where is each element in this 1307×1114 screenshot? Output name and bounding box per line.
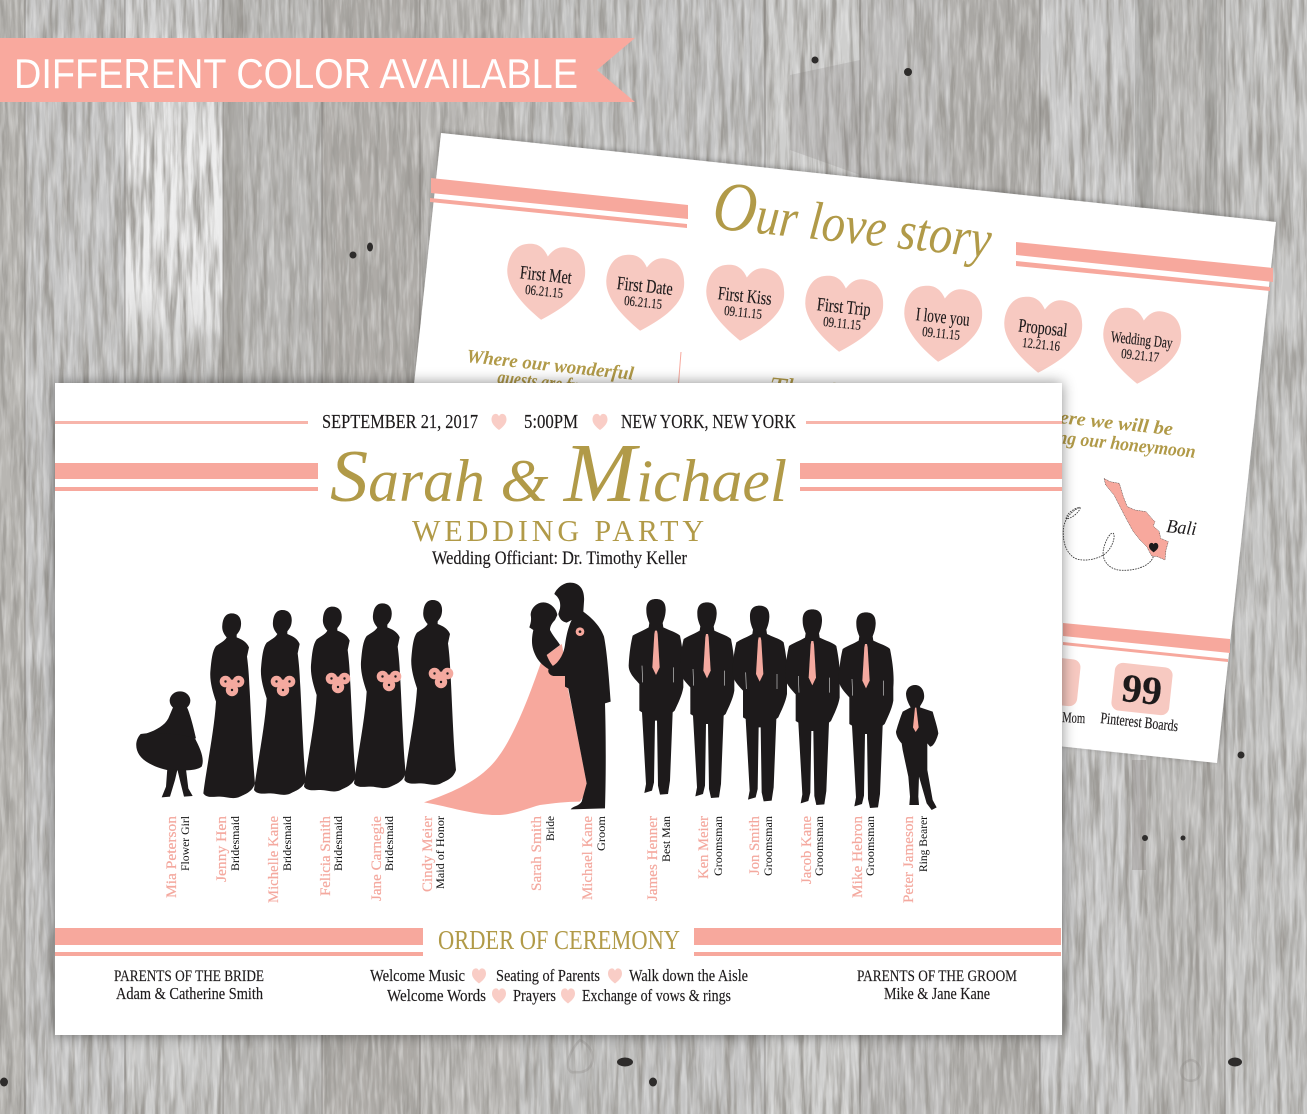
label: jenny hen (214, 815, 242, 882)
heart: wedding day: 09.21.17 (1120, 347, 1160, 366)
label: jane carnegie: Bridesmaid (382, 816, 396, 871)
ceremony order list: Seating of Parents (496, 966, 600, 985)
silhouette: best man james (629, 599, 684, 795)
silhouette: groom (548, 583, 611, 809)
heart: proposal (999, 294, 1085, 377)
heart: i love you: 09.11.15 (921, 325, 961, 344)
silhouette: groomsman jon (732, 606, 787, 801)
silhouette: groomsman jacob (785, 609, 840, 805)
label: jacob kane: Jacob Kane (799, 816, 815, 884)
banner: different color available: DIFFERENT COLOR AVAILABLE (14, 50, 578, 97)
header left stripes (55, 463, 318, 491)
top left stripes (430, 178, 688, 228)
silhouette: groomsman mike (839, 612, 894, 808)
header right stripes (800, 463, 1062, 491)
parents of the bride: PARENTS OF THE BRIDE (114, 968, 264, 985)
wedding party heading: WEDDING PARTY (412, 513, 708, 548)
bali map (1063, 478, 1168, 570)
silhouette: ring bearer (896, 685, 938, 810)
label: ken meier: Ken Meier (696, 816, 712, 879)
silhouette: bride upper body (529, 602, 560, 670)
label: jacob kane: Groomsman (812, 816, 826, 876)
ceremony right stripes (694, 928, 1061, 956)
label: cindy meier: Maid of Honor (433, 816, 447, 889)
label: sarah smith (529, 815, 557, 891)
label: felicia smith: Bridesmaid (331, 816, 345, 871)
parents of the groom (857, 968, 1017, 1003)
groomsmen silhouettes (629, 599, 938, 810)
label: michael kane: Groom (594, 815, 608, 851)
honeymoon script text: Where we will be (1029, 404, 1174, 440)
label: ken meier (696, 816, 725, 879)
heart: first kiss: First Kiss (717, 283, 773, 310)
heart: first met (502, 241, 588, 324)
label: jenny hen: Bridesmaid (228, 816, 242, 871)
date, time and place line (322, 411, 796, 433)
label: michael kane (580, 815, 608, 900)
ceremony order list (370, 966, 748, 1005)
silhouette: bride dress (424, 644, 587, 815)
stat label: pinterest boards: Pinterest Boards (1100, 710, 1179, 735)
heart: first kiss: 09.11.15 (723, 304, 763, 323)
ceremony order list: Walk down the Aisle (629, 966, 748, 985)
ceremony order list: Welcome Music (370, 966, 465, 985)
parents of the bride (114, 968, 264, 1003)
label: jon smith: Groomsman (761, 816, 775, 876)
heart: first trip (800, 273, 886, 356)
label: michelle kane: Michelle Kane (266, 816, 282, 903)
front card: wedding party (55, 383, 1062, 1035)
heart: first met: 06.21.15 (524, 283, 564, 302)
label: peter jameson (901, 815, 930, 903)
ceremony left stripes (55, 928, 423, 956)
script title: our love story: Our love story (709, 167, 996, 274)
label: james henner: James Henner (645, 816, 661, 901)
boutonniere (576, 627, 584, 636)
label: james henner: Best Man (659, 816, 673, 862)
label: michael kane: Michael Kane (580, 816, 596, 900)
label: ken meier: Groomsman (711, 816, 725, 876)
guests script text: Where our wonderful (465, 346, 635, 385)
label: mia peterson: Mia Peterson (164, 815, 180, 898)
silhouette: bridesmaid michelle (254, 610, 306, 795)
label: mike hebron: Groomsman (863, 816, 877, 876)
couple names: Sarah & Michael (330, 427, 787, 520)
bali label: Bali (1165, 516, 1198, 540)
back card: our love story (383, 133, 1276, 763)
heart: wedding day: Wedding Day (1110, 329, 1173, 352)
heart: proposal: 12.21.16 (1021, 336, 1061, 355)
stat: 99 pinterest boards (1111, 662, 1173, 716)
top right stripes (1016, 242, 1273, 291)
parents of the groom: PARENTS OF THE GROOM (857, 968, 1017, 985)
vertical divider (678, 352, 681, 390)
label: michelle kane (266, 816, 294, 903)
heart: wedding day (1098, 305, 1184, 388)
heart: first date: First Date (616, 273, 674, 300)
date, time and place line: 5:00PM (524, 411, 578, 433)
label: cindy meier: Cindy Meier (420, 816, 436, 892)
label: michelle kane: Bridesmaid (280, 816, 294, 871)
parents of the groom: Mike & Jane Kane (884, 984, 990, 1003)
silhouette: bridesmaid jane (354, 603, 406, 788)
label: jane carnegie (369, 816, 396, 901)
stat: 99 pinterest boards: 99 (1120, 665, 1164, 714)
header thin lines (55, 421, 1062, 424)
parents of the bride: Adam & Catherine Smith (116, 984, 264, 1003)
heart: first trip: 09.11.15 (822, 315, 862, 334)
label: sarah smith: Bride (543, 816, 557, 841)
label: jon smith: Jon Smith (747, 815, 763, 875)
label: sarah smith: Sarah Smith (529, 815, 545, 891)
silhouette: flower girl (136, 691, 203, 797)
ceremony order list: Welcome Words (387, 986, 486, 1005)
silhouette: groomsman ken (680, 602, 735, 798)
label: felicia smith: Felicia Smith (318, 815, 334, 896)
label: jane carnegie: Jane Carnegie (369, 816, 385, 901)
label: jon smith (747, 815, 775, 876)
silhouette: bridesmaid jenny (203, 613, 255, 798)
honeymoon script text: spending our honeymoon (1009, 422, 1197, 463)
vertical name labels (164, 815, 930, 903)
ceremony order list: Prayers (513, 986, 556, 1005)
label: peter jameson: Ring Bearer (916, 816, 930, 872)
heart: first kiss (701, 262, 787, 345)
heart: proposal: Proposal (1017, 315, 1068, 342)
bouquets (220, 668, 453, 696)
heart: first date (601, 252, 687, 335)
bottom stripes (1063, 623, 1230, 662)
heart: first met: First Met (519, 262, 573, 289)
label: felicia smith (318, 815, 345, 896)
silhouette: bridesmaid felicia (304, 607, 356, 791)
label: james henner (645, 816, 673, 901)
officiant: Wedding Officiant: Dr. Timothy Keller (432, 548, 688, 569)
label: mia peterson (164, 815, 192, 898)
label: mia peterson: Flower Girl (178, 815, 192, 871)
label: peter jameson: Peter Jameson (901, 815, 917, 903)
heart: first date: 06.21.15 (623, 294, 663, 313)
guests script text: guests are from (496, 367, 598, 399)
label: jenny hen: Jenny Hen (214, 815, 230, 882)
heart: i love you (899, 283, 985, 366)
silhouette: maid of honor cindy (404, 600, 456, 785)
label: cindy meier (420, 816, 447, 892)
date, time and place line: SEPTEMBER 21, 2017 (322, 411, 478, 433)
heart: first trip: First Trip (816, 294, 872, 321)
stat label: mom: Mom (1062, 710, 1086, 727)
bridal party silhouettes (136, 583, 611, 815)
stat box partly hidden (1018, 654, 1081, 707)
ceremony order list: Exchange of vows & rings (582, 986, 731, 1005)
label: mike hebron (850, 815, 877, 898)
label: jacob kane (799, 816, 826, 884)
date, time and place line: NEW YORK, NEW YORK (621, 411, 796, 433)
label: mike hebron: Mike Hebron (850, 815, 866, 898)
heart: i love you: I love you (915, 304, 971, 331)
thank you script text: Thank You (767, 369, 895, 418)
honeymoon script text (1009, 404, 1197, 463)
order of ceremony heading: ORDER OF CEREMONY (438, 925, 680, 955)
